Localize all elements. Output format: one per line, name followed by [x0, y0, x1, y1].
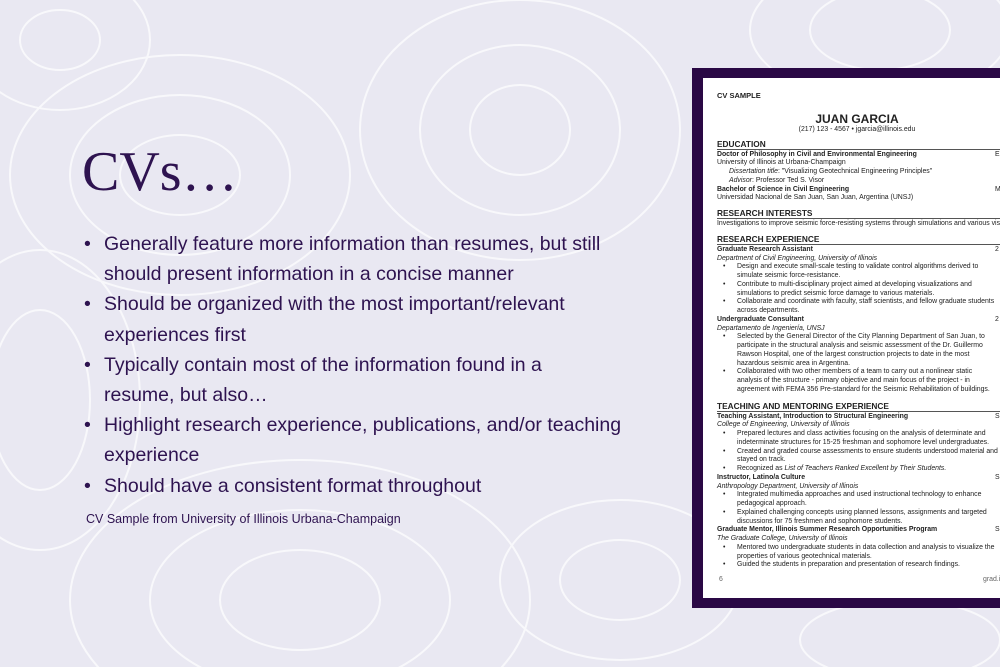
CV sample document: S: [995, 412, 1000, 420]
CV sample document: Rawson Hospital, one of the largest construction projects to date in the most: [737, 351, 970, 358]
CV sample image frame: [692, 68, 1000, 608]
CV sample document: Universidad Nacional de San Juan, San Juan, Argentina (UNSJ): [717, 194, 913, 201]
bullet list: Should be organized with the most important/relevant experiences first: [104, 293, 565, 346]
CV sample document: participate in the structural analysis and seismic assessment of the Dr. Guillermo: [737, 342, 983, 349]
CV sample document: Advisor: Professor Ted S. Visor: [729, 177, 824, 184]
CV sample document: TEACHING AND MENTORING EXPERIENCE: [717, 400, 889, 410]
CV sample document: Doctor of Philosophy in Civil and Environmental Engineering: [717, 150, 917, 158]
CV sample document: indeterminate structures for 15-25 freshman and sophomore level undergraduates.: [737, 439, 989, 446]
CV sample document: Graduate Mentor, Illinois Summer Research Opportunities Program: [717, 526, 937, 533]
CV sample document: 6: [719, 576, 723, 583]
CV sample document: EDUCATION: [717, 138, 766, 148]
bullet list: Should have a consistent format throughout: [104, 475, 481, 497]
CV sample document: Mentored two undergraduate students in data collection and analysis to visualize the: [737, 544, 994, 551]
CV sample document: E: [995, 150, 1000, 158]
CV sample document: Departamento de Ingeniería, UNSJ: [717, 324, 825, 332]
CV sample document: College of Engineering, University of Illinois: [717, 421, 850, 428]
CV sample document: CV SAMPLE: [717, 91, 761, 100]
CV sample document: 2: [995, 316, 999, 323]
CV sample document: Guided the students in preparation and presentation of research findings.: [737, 561, 960, 568]
CV sample document: simulations to predict seismic force damage to various materials.: [737, 290, 934, 296]
CV sample document: 2: [995, 246, 999, 253]
CV sample document: hazardous seismic area in Argentina.: [737, 360, 850, 366]
CV sample document: analysis of the structure - primary objective and main focus of the project - in: [737, 377, 970, 384]
bullet list: Highlight research experience, publications, and/or teaching experience: [104, 414, 621, 466]
CV sample document: Collaborated with two other members of a team to carry out a nonlinear static: [737, 368, 972, 375]
title: CVs…: [82, 141, 238, 203]
CV sample document: Recognized as List of Teachers Ranked Excellent by Their Students.: [737, 465, 946, 472]
CV sample document: Explained challenging concepts using planned lessons, assignments and targeted: [737, 509, 987, 516]
CV sample document: RESEARCH EXPERIENCE: [717, 234, 819, 244]
CV sample document: agreement with FEMA 356 Pre-standard for the Seismic Rehabilitation of buildings.: [737, 386, 990, 393]
CV sample document: Instructor, Latino/a Culture: [717, 474, 805, 481]
CV sample document: Created and graded course assessments to ensure students understood material and: [737, 448, 998, 454]
CV sample document: Prepared lectures and class activities focusing on the analysis of determinate and: [737, 430, 986, 437]
CV sample document: properties of various geotechnical materials.: [737, 552, 872, 560]
CV sample document: [703, 78, 1000, 598]
CV sample document: Collaborate and coordinate with faculty, staff scientists, and fellow graduate students: [737, 298, 994, 305]
CV sample document: across departments.: [737, 307, 799, 314]
CV sample document: Department of Civil Engineering, University of Illinois: [717, 254, 877, 262]
CV sample document: pedagogical approach.: [737, 500, 807, 507]
CV sample document: stayed on track.: [737, 456, 786, 463]
bullet list: [84, 233, 621, 497]
CV sample document: Anthropology Department, University of Illinois: [717, 482, 858, 490]
CV sample document: Teaching Assistant, Introduction to Structural Engineering: [717, 412, 908, 420]
CV sample document: RESEARCH INTERESTS: [717, 208, 812, 218]
CV sample document: Dissertation title: "Visualizing Geotechnical Engineering Principles": [729, 168, 932, 175]
bullet list: Generally feature more information than resumes, but still should present information in a concise manner: [104, 233, 600, 285]
CV sample document: S: [995, 474, 1000, 481]
CV sample document: The Graduate College, University of Illinois: [717, 535, 848, 542]
CV sample document: simulate seismic force-resistance.: [737, 272, 840, 279]
CV sample document: Design and execute small-scale testing to validate control algorithms derived to: [737, 263, 978, 270]
CV sample document: S: [995, 526, 1000, 533]
CV sample document: Integrated multimedia approaches and used instructional technology to enhance: [737, 491, 981, 498]
CV sample document: Bachelor of Science in Civil Engineering: [717, 186, 849, 192]
bullet list: Typically contain most of the information found in a: [104, 354, 542, 376]
bullet list: resume, but also…: [104, 384, 268, 406]
caption: CV Sample from University of Illinois Urbana-Champaign: [86, 512, 401, 526]
CV sample document: University of Illinois at Urbana-Champaign: [717, 159, 846, 166]
CV sample document: Undergraduate Consultant: [717, 316, 804, 323]
CV sample document: (217) 123 - 4567 • jgarcia@illinois.edu: [799, 126, 915, 133]
CV sample document: Contribute to multi-disciplinary project aimed at developing visualizations and: [737, 281, 972, 288]
CV sample document: Selected by the General Director of the City Planning Department of San Juan, to: [737, 333, 985, 340]
CV sample document: Graduate Research Assistant: [717, 246, 813, 253]
CV sample document: JUAN GARCIA: [815, 112, 899, 126]
CV sample document: discussions for 75 freshmen and sophomore students.: [737, 518, 902, 524]
